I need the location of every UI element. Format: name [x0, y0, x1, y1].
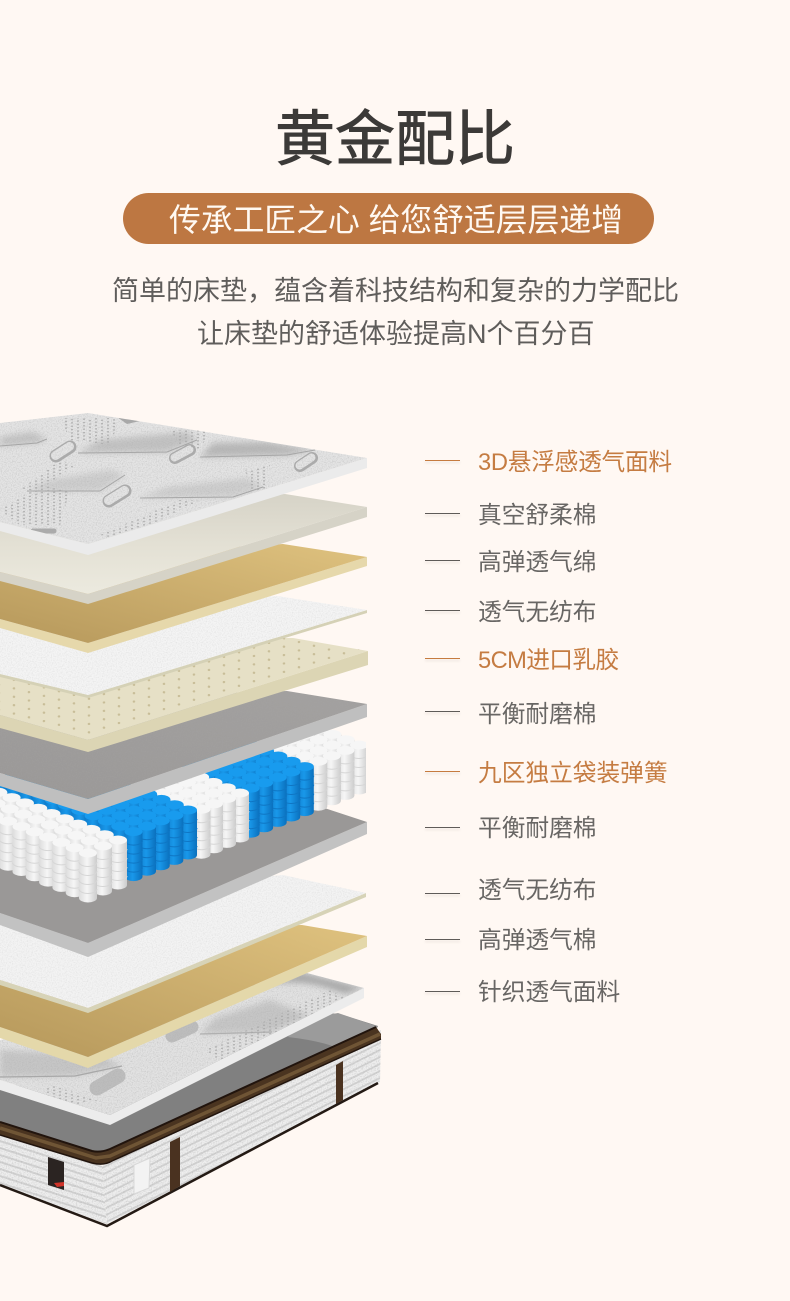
label: balance foam: 平衡耐磨棉 [478, 702, 596, 728]
layer: gold breathable foam lower [0, 925, 367, 1068]
layer: gold breathable foam upper [0, 544, 367, 653]
layer: vacuum soft foam [0, 494, 367, 604]
banner text: 传承工匠之心 给您舒适层层递增 [169, 202, 623, 238]
mattress strap front [170, 1137, 180, 1192]
layer: knit breathable fabric [0, 972, 364, 1125]
label: pocket springs: 九区独立袋装弹簧 [478, 761, 668, 787]
layer: grey balance foam upper [0, 691, 367, 814]
mattress grey top surface [0, 1010, 378, 1152]
label: non-woven: 透气无纺布 [478, 600, 596, 626]
banner pill [123, 193, 654, 244]
label: 3D floating fabric: 3D悬浮感透气面料 [478, 450, 672, 476]
intro text line 1: 简单的床垫，蕴含着科技结构和复杂的力学配比 [112, 276, 679, 306]
layer: 3D floating breathable fabric [0, 413, 367, 555]
mattress quilted side right [102, 1030, 381, 1224]
layer: white non-woven upper [0, 596, 367, 698]
mattress exploded diagram [0, 413, 382, 1228]
mattress brown border [0, 1027, 381, 1164]
label: non-woven lower: 透气无纺布 [478, 878, 596, 904]
layer: white non-woven lower [0, 875, 366, 1013]
label: vacuum soft foam: 真空舒柔棉 [478, 503, 596, 529]
intro text line 2: 让床垫的舒适体验提高N个百分百 [197, 319, 594, 349]
label: high-elastic foam: 高弹透气绵 [478, 550, 596, 576]
mattress label tag [48, 1157, 64, 1190]
mattress strap right [336, 1061, 343, 1104]
mattress quilted side left [0, 1132, 107, 1224]
label: latex: 5CM进口乳胶 [478, 648, 619, 674]
layer: grey balance foam lower [0, 800, 367, 957]
title: 黄金配比 [275, 106, 515, 173]
layer: 5CM imported latex [0, 638, 368, 752]
label: high-elastic foam lower: 高弹透气棉 [478, 928, 596, 954]
layer: nine-zone pocket springs [0, 730, 366, 902]
label: knit fabric: 针织透气面料 [478, 980, 620, 1006]
label: balance foam lower: 平衡耐磨棉 [478, 816, 596, 842]
mattress base [0, 1010, 381, 1226]
mattress white sticker [134, 1158, 150, 1194]
